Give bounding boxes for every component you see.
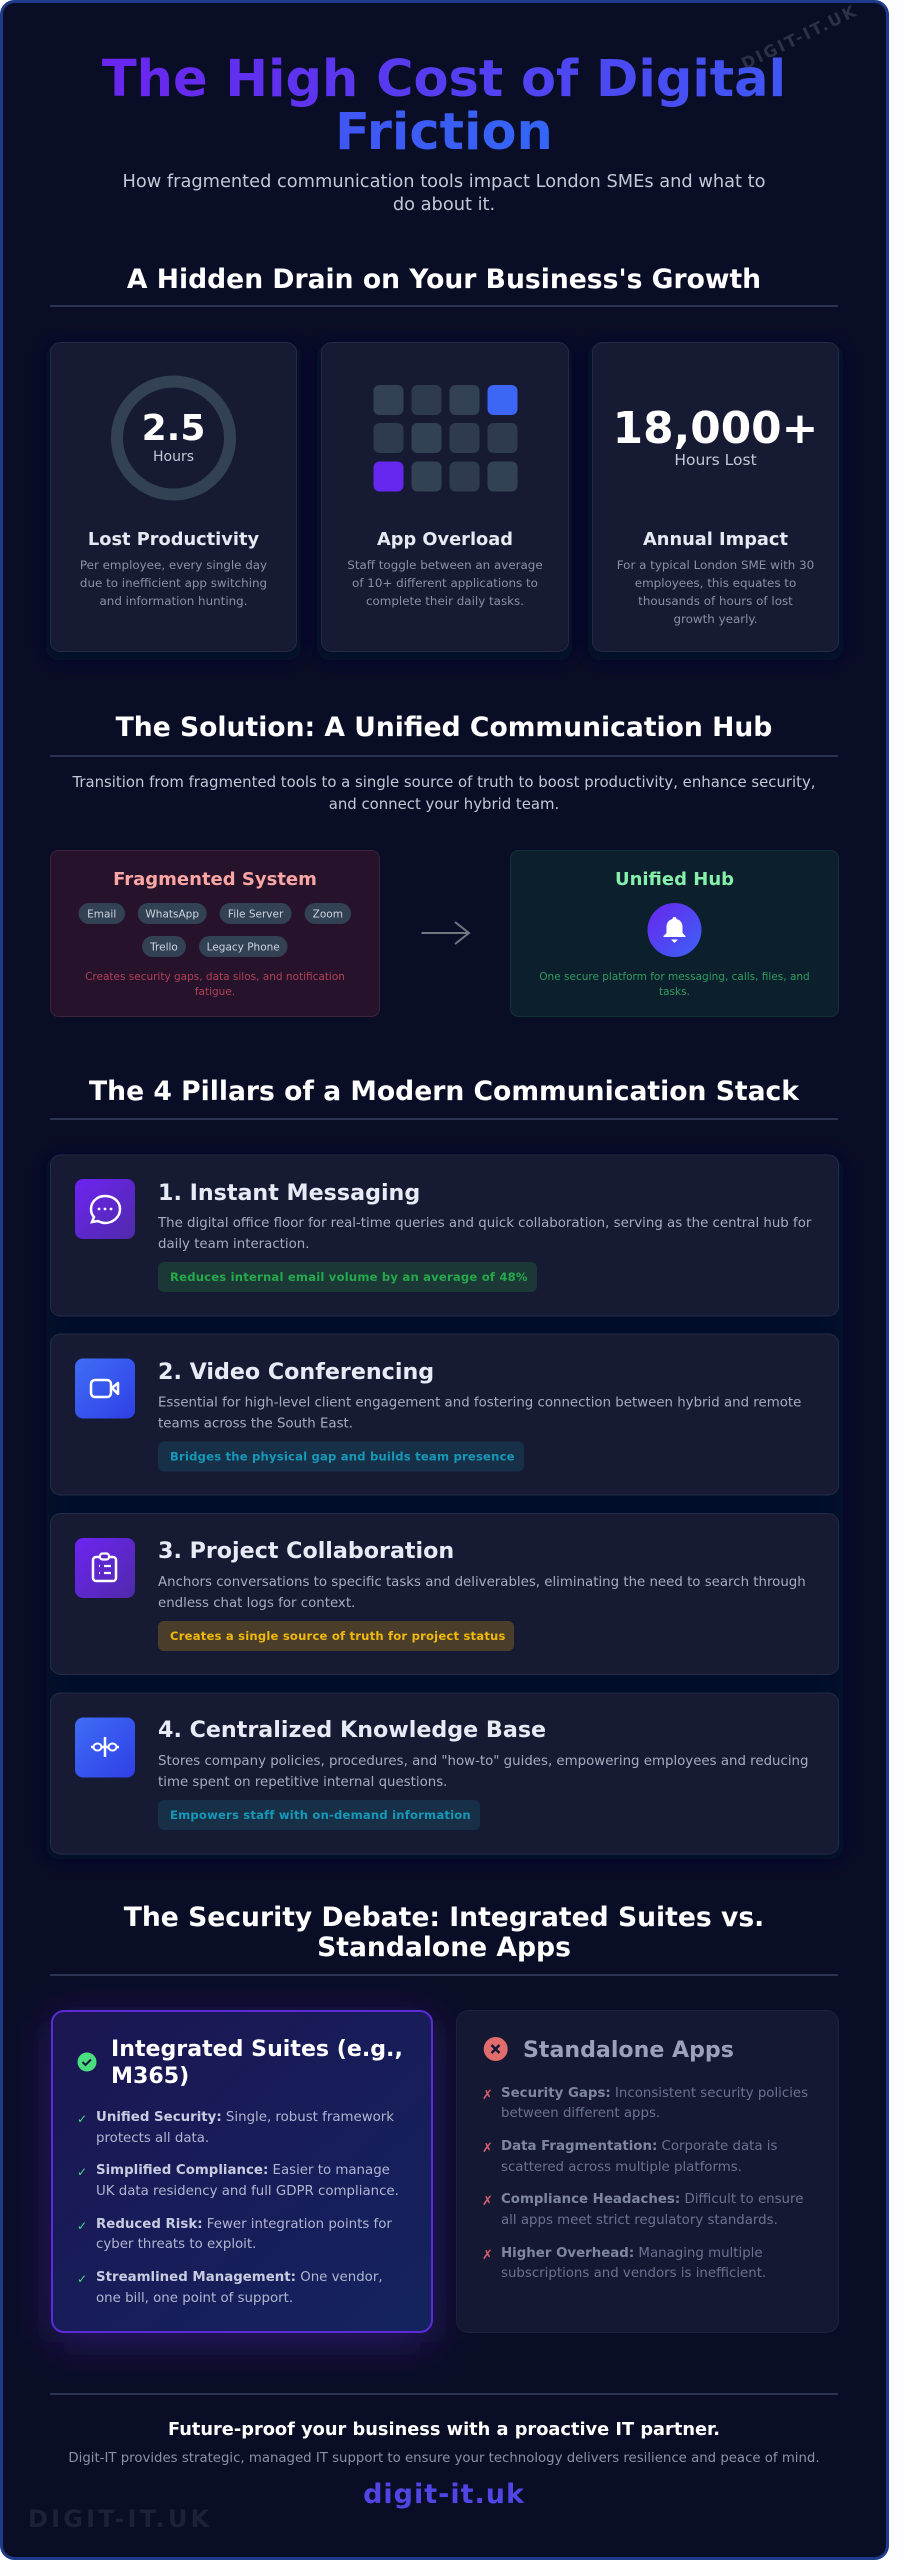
panel: project collaboration: endless chat logs for context. (158, 1596, 355, 1611)
callout (158, 1800, 480, 1830)
ring stat: 2.5 hours: 2.5 (142, 408, 205, 449)
panel: fragmented system: Fragmented System (113, 869, 317, 890)
list: benefits: Unified Security: Single, robust framework (96, 2110, 394, 2125)
icon: video (75, 1358, 135, 1418)
callout (158, 1621, 514, 1651)
panel: annual impact: growth yearly. (673, 612, 758, 626)
panel: instant messaging (50, 1155, 838, 1316)
footer: Digit-IT provides strategic, managed IT support to ensure your technology delivers resilience and peace of mind. (68, 2451, 820, 2466)
app grid icon (374, 385, 518, 492)
panel: video conferencing: teams across the South East. (158, 1416, 353, 1432)
panel: annual impact: employees, this equates to (635, 576, 796, 590)
panel: standalone apps: Standalone Apps (523, 2037, 734, 2063)
panel: app overload (317, 342, 572, 660)
chips: Email (87, 908, 116, 920)
big stat: 18,000+ (613, 403, 818, 454)
panel: unified hub: tasks. (659, 986, 690, 998)
icon: knowledge (75, 1718, 135, 1778)
list: benefits: cyber threats to exploit. (96, 2237, 256, 2252)
icon: clipboard (75, 1538, 135, 1598)
list: benefits (77, 2110, 399, 2306)
list: drawbacks: Higher Overhead: Managing multiple (501, 2246, 763, 2261)
heading: 4 pillars: The 4 Pillars of a Modern Communication Stack (89, 1076, 800, 1107)
title: The High Cost of Digital (102, 50, 786, 109)
panel: project collaboration: 3. Project Collaboration (158, 1538, 454, 1564)
list: benefits: Reduced Risk: Fewer integration points for (96, 2217, 392, 2232)
heading: hidden drain: A Hidden Drain on Your Business's Growth (127, 264, 761, 295)
icon: bell (648, 903, 702, 957)
panel: annual impact (588, 342, 843, 660)
list: benefits: ✓ (77, 2219, 87, 2233)
panel: lost productivity: due to inefficient app switching (80, 576, 267, 590)
panel: knowledge base (50, 1693, 838, 1854)
list: drawbacks: Data Fragmentation: Corporate data is (501, 2139, 778, 2154)
subtitle: do about it. (393, 194, 495, 215)
panel: knowledge base: 4. Centralized Knowledge Base (158, 1717, 546, 1743)
list: benefits: ✓ (77, 2112, 87, 2126)
intro text: Transition from fragmented tools to a single source of truth to boost productivity, enhance security, (71, 773, 816, 791)
icon: check badge (78, 2052, 96, 2072)
ring stat: 2.5 hours (117, 382, 230, 494)
list: drawbacks: ✗ (482, 2088, 493, 2103)
arrow (422, 922, 469, 944)
list: benefits: Simplified Compliance: Easier to manage (96, 2163, 390, 2178)
panel: app overload: complete their daily tasks. (366, 594, 524, 608)
list: benefits: Streamlined Management: One vendor, (96, 2270, 383, 2285)
icon: chat (75, 1179, 135, 1239)
list: drawbacks: scattered across multiple platforms. (501, 2160, 742, 2175)
panel: lost productivity: and information hunting. (100, 594, 248, 608)
list: benefits: UK data residency and full GDPR compliance. (96, 2184, 399, 2199)
panel: instant messaging: daily team interaction. (158, 1237, 309, 1252)
heading: security debate: The Security Debate: Integrated Suites vs. (124, 1902, 764, 1933)
ring stat: 2.5 hours: Hours (153, 449, 194, 465)
heading: security debate (50, 1902, 838, 1976)
panel: app overload: of 10+ different applications to (352, 576, 538, 590)
pillar card shadow (46, 1157, 843, 1859)
panel: unified hub (510, 850, 838, 1016)
panel: unified hub: Unified Hub (615, 869, 734, 890)
callout (158, 1442, 524, 1472)
heading: the solution: The Solution: A Unified Communication Hub (116, 712, 772, 743)
chips: WhatsApp (145, 908, 199, 920)
panel: fragmented system: Creates security gaps, data silos, and notification (85, 971, 345, 983)
panel: project collaboration: Anchors conversations to specific tasks and deliverables, eliminating the need to search through (158, 1575, 806, 1590)
panel: integrated suites: Integrated Suites (e.g., (111, 2036, 403, 2062)
list: drawbacks: Compliance Headaches: Difficult to ensure (501, 2192, 803, 2207)
callout: Empowers staff with on-demand information (170, 1808, 471, 1822)
callout (158, 1262, 537, 1292)
panel: instant messaging: The digital office floor for real-time queries and quick collaboration, serving as the central hub for (157, 1216, 812, 1231)
panel: app overload: App Overload (377, 529, 513, 550)
chips (78, 903, 351, 957)
panel: video conferencing (50, 1334, 838, 1495)
callout: Creates a single source of truth for project status (170, 1629, 506, 1643)
list: drawbacks: all apps meet strict regulatory standards. (501, 2213, 778, 2228)
title (102, 50, 786, 162)
list: drawbacks: subscriptions and vendors is inefficient. (501, 2266, 766, 2281)
panel: video conferencing: Essential for high-level client engagement and fostering connection between hybrid and remote (158, 1396, 801, 1410)
chips: Legacy Phone (207, 942, 280, 954)
title: Friction (335, 103, 553, 162)
callout: Bridges the physical gap and builds team presence (170, 1450, 515, 1464)
panel: unified hub: One secure platform for messaging, calls, files, and (539, 971, 810, 983)
callout: Reduces internal email volume by an average of 48% (170, 1270, 528, 1284)
watermark: top right: DIGIT-IT.UK (738, 1, 861, 74)
list: drawbacks: ✗ (482, 2194, 493, 2209)
panel: integrated suites: M365) (111, 2063, 189, 2089)
footer: digit-it.uk (363, 2479, 525, 2510)
list: benefits: ✓ (77, 2272, 87, 2286)
list: drawbacks: between different apps. (501, 2106, 660, 2121)
list: drawbacks: ✗ (482, 2141, 493, 2156)
subtitle: How fragmented communication tools impact London SMEs and what to (122, 171, 766, 192)
panel: video conferencing: 2. Video Conferencing (158, 1359, 434, 1385)
intro text (71, 773, 816, 813)
panel: fragmented system (50, 850, 380, 1016)
panel: instant messaging: 1. Instant Messaging (158, 1180, 420, 1206)
panel: knowledge base: time spent on repetitive internal questions. (158, 1775, 447, 1790)
list: benefits: ✓ (77, 2165, 87, 2179)
list: benefits: one bill, one point of support. (96, 2291, 293, 2306)
chips: Zoom (313, 908, 343, 920)
subtitle (122, 171, 766, 215)
list: drawbacks (482, 2086, 808, 2281)
chips: File Server (228, 908, 284, 920)
heading: security debate: Standalone Apps (317, 1932, 571, 1963)
panel: lost productivity (46, 342, 301, 660)
panel: fragmented system: fatigue. (195, 986, 235, 998)
intro text: and connect your hybrid team. (329, 795, 559, 813)
panel: annual impact: thousands of hours of lost (638, 594, 793, 608)
panel: knowledge base: Stores company policies, procedures, and "how-to" guides, empowering employees and reducing (158, 1754, 808, 1769)
panel: lost productivity: Per employee, every single day (80, 558, 267, 572)
panel: lost productivity: Lost Productivity (88, 529, 259, 550)
panel: app overload: Staff toggle between an average (347, 558, 543, 572)
panel: project collaboration (50, 1514, 838, 1674)
panel: integrated suites (51, 2011, 433, 2342)
watermark: bottom left: DIGIT-IT.UK (28, 2505, 212, 2533)
list: drawbacks: Security Gaps: Inconsistent security policies (501, 2086, 808, 2101)
panel: standalone apps (456, 2010, 838, 2332)
big stat: Hours Lost (674, 451, 757, 469)
panel: annual impact: For a typical London SME with 30 (617, 558, 814, 572)
icon: x badge (484, 2037, 508, 2061)
footer: Future-proof your business with a proactive IT partner. (168, 2419, 720, 2440)
panel: annual impact: Annual Impact (643, 529, 788, 550)
list: drawbacks: ✗ (482, 2248, 493, 2263)
chips: Trello (149, 942, 178, 954)
footer (50, 2393, 838, 2510)
list: benefits: protects all data. (96, 2131, 209, 2146)
